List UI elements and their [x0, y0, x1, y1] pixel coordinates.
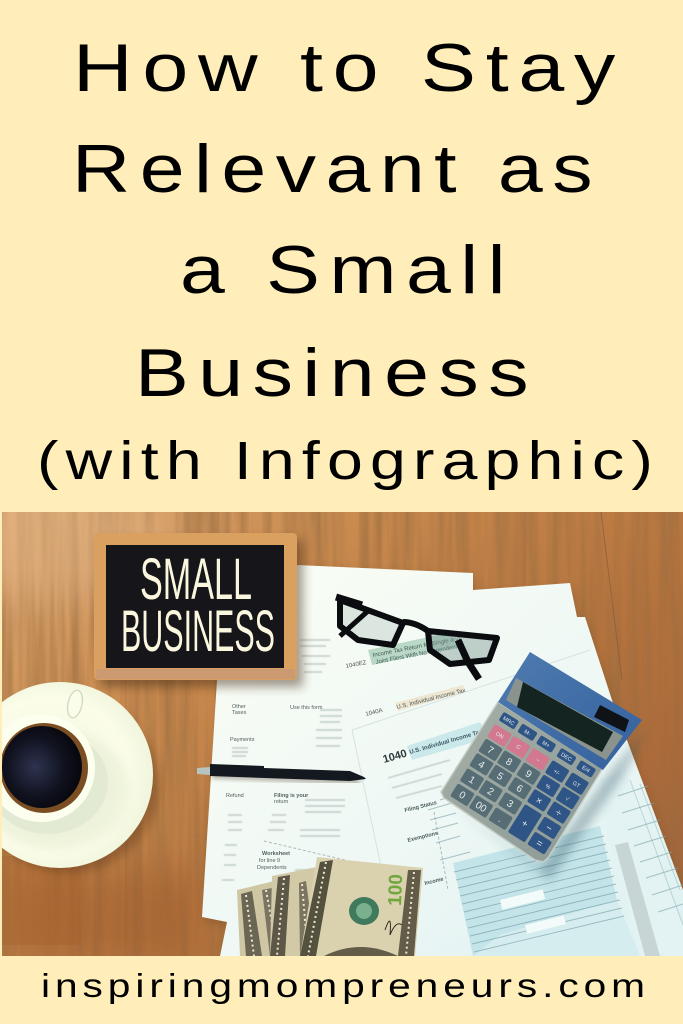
form table with light blue rows: Income [424, 876, 444, 887]
glasses [336, 597, 497, 679]
calculator [441, 652, 648, 880]
form table with light blue rows: Filing Status [404, 800, 438, 814]
bill left [237, 882, 272, 956]
form header 1040: U.S. Individual Income Tax Return [409, 723, 504, 756]
calculator keys: % [544, 783, 551, 791]
calculator keys: 1 [466, 774, 477, 787]
calculator keys: 6 [514, 783, 525, 795]
calculator keys: × [533, 795, 544, 808]
calculator keys: 3 [504, 798, 515, 811]
left page blocks: Payments [230, 737, 255, 743]
title: Relevant as [72, 131, 602, 207]
highlighted form header 1040EZ: Joint Filers With No Dependents [375, 644, 461, 666]
chalkboard: small business [94, 533, 303, 687]
calculator keys: √ [564, 795, 571, 803]
chalkboard: small business: SMALL [140, 547, 252, 612]
bill right with 100 [300, 857, 423, 956]
title [37, 30, 660, 491]
bill right with 100: 100 [385, 874, 407, 906]
left page blocks: Taxes [232, 710, 247, 716]
title: Business [135, 335, 538, 411]
form table with light blue rows: Exemptions [407, 831, 439, 844]
calculator body [441, 702, 603, 862]
calculator keys: 9 [523, 769, 534, 781]
calculator keys: +/- [552, 769, 561, 777]
form header 1040A: U.S. Individual Income Tax [396, 688, 466, 711]
pen [197, 764, 366, 782]
form header 1040: 1040 [382, 748, 408, 766]
calculator keys: . [496, 814, 504, 825]
calculator keys: ÷ [553, 807, 564, 820]
left page blocks: Filing is your [274, 793, 309, 799]
calculator keys: DEC [559, 752, 573, 763]
calculator keys: 2 [485, 786, 496, 799]
left page blocks: for line 9 [259, 858, 280, 864]
calculator keys: 4 [476, 759, 487, 772]
calculator keys: 7 [485, 745, 496, 757]
calculator keys: 8 [503, 756, 514, 769]
calculator keys: ON [494, 731, 504, 741]
title: (with Infographic) [37, 431, 660, 491]
title: How to Stay [73, 30, 625, 106]
website footer: inspiringmompreneurs.com [41, 967, 650, 1004]
bill middle [270, 867, 316, 956]
calculator keys: = [534, 838, 545, 850]
calculator keys: → [534, 756, 541, 764]
title: a Small [180, 232, 515, 308]
form header 1040A: 1040A [365, 708, 383, 718]
calculator keys: MRC [501, 716, 515, 727]
paper stack shadow [206, 570, 683, 956]
form table with light blue rows [404, 770, 683, 956]
highlighted form header 1040EZ: Income Tax Return for Single and [372, 636, 461, 659]
left page blocks: Refund [226, 793, 244, 799]
coffee cup on saucer [0, 682, 158, 873]
calculator top with display [498, 652, 642, 770]
left page blocks [226, 704, 323, 871]
calculator keys: GT [571, 780, 581, 790]
form header 1040A [365, 685, 466, 718]
calculator keys: 0 [457, 790, 468, 802]
photo: desk with small business items [0, 480, 683, 960]
calculator keys: M+ [541, 740, 551, 749]
calculator keys: − [543, 822, 554, 835]
chalkboard: small business: BUSINESS [121, 599, 275, 664]
left page blocks: return [274, 799, 288, 805]
left page blocks: Other [232, 704, 246, 710]
calculator keys: + [519, 818, 530, 830]
highlighted form header 1040EZ: 1040EZ [345, 660, 367, 670]
left page blocks: Use this form [290, 705, 323, 711]
left page blocks: Dependents [257, 865, 287, 871]
tax form papers [202, 565, 683, 956]
calculator keys: M- [523, 729, 531, 738]
calculator keys: 5 [494, 771, 505, 783]
calculator keys: E/4 [580, 765, 591, 775]
wooden desk surface [0, 480, 683, 960]
dollar bills [237, 857, 423, 956]
calculator keys: C [515, 744, 521, 751]
form header 1040 [383, 722, 482, 763]
calculator keys: 00 [473, 800, 489, 815]
small text placeholder lines [222, 640, 450, 880]
left page blocks: Worksheet [262, 851, 290, 857]
highlighted form header 1040EZ [346, 635, 460, 668]
calculator keys [450, 711, 597, 855]
